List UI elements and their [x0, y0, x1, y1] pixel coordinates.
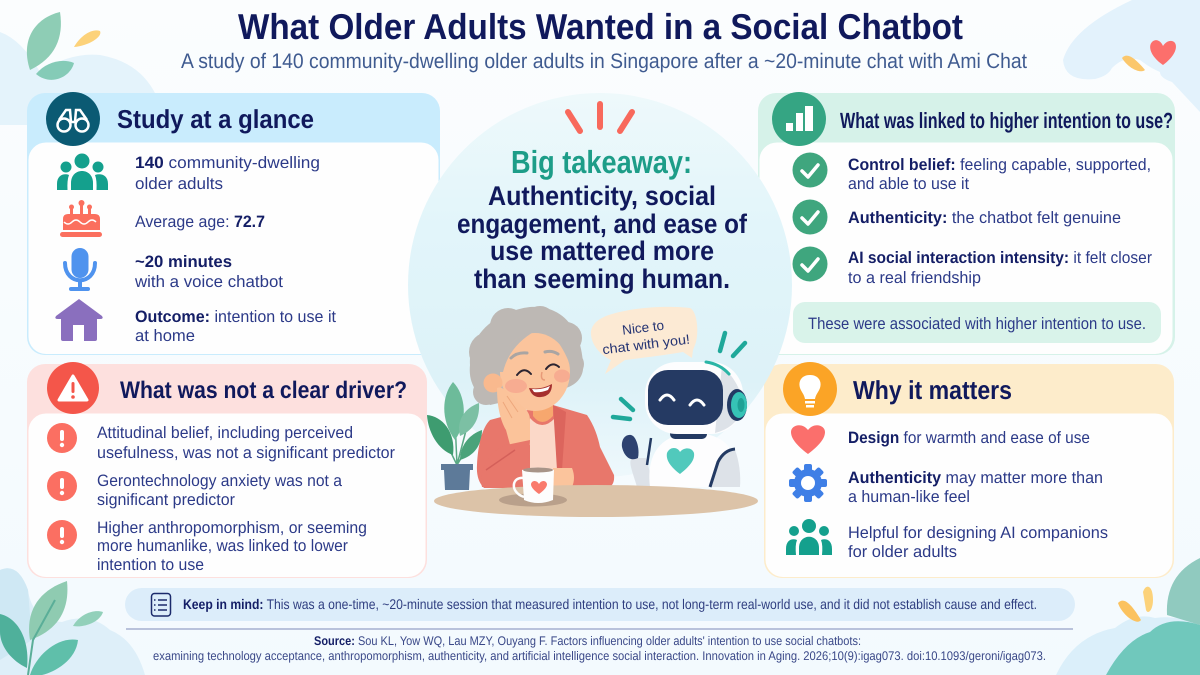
item: authenticity: Authenticity: the chatbot felt genuine [848, 209, 1121, 227]
icon: document [152, 594, 170, 616]
item: gerontechnology anxiety: significant predictor [97, 491, 235, 509]
item: AI companions: Helpful for designing AI companions [848, 524, 1108, 542]
heading: not a clear driver: What was not a clear driver? [120, 377, 407, 404]
item: attitudinal belief: Attitudinal belief, including perceived [97, 424, 353, 442]
decoration: bottom-left cloud and leaves [0, 568, 145, 675]
text: outcome: Outcome: intention to use it [135, 308, 336, 326]
main title: What Older Adults Wanted in a Social Chatbot [238, 6, 963, 47]
big takeaway text: use mattered more [490, 236, 714, 266]
divider [126, 628, 1073, 630]
heading: study at a glance: Study at a glance [117, 104, 314, 134]
big takeaway text: engagement, and ease of [457, 209, 748, 239]
item: design [791, 425, 1090, 454]
sleeve [481, 440, 530, 488]
subtitle: A study of 140 community-dwelling older adults in Singapore after a ~20-minute chat with Ami Chat [181, 50, 1027, 73]
item: authenticity gear: Authenticity may matter more than [848, 469, 1103, 487]
text: session length: ~20 minutes [135, 253, 232, 271]
woman [469, 306, 614, 488]
big takeaway text: than seeming human. [474, 264, 730, 294]
panel: why it matters [764, 362, 1174, 578]
item: control belief [792, 152, 1151, 193]
text: participants: 140 community-dwelling [135, 154, 320, 172]
hair [469, 306, 584, 405]
coffee mug [499, 468, 567, 506]
icon: light bulb [783, 362, 837, 416]
item: social interaction intensity: AI social interaction intensity: it felt closer [848, 249, 1152, 267]
item: authenticity gear [789, 464, 1103, 506]
keep in mind bar [125, 588, 1075, 621]
item: anthropomorphism: Higher anthropomorphism, or seeming [97, 519, 367, 537]
icon: birthday cake [60, 200, 102, 237]
robot [613, 333, 747, 487]
item: anthropomorphism: intention to use [97, 556, 204, 574]
item: authenticity gear: a human-like feel [848, 488, 970, 506]
callout: association note [793, 302, 1161, 343]
speech bubble: chat with you! [602, 332, 691, 357]
callout: association note: These were associated with higher intention to use. [808, 315, 1146, 333]
item: attitudinal belief: usefulness, was not a significant predictor [97, 444, 395, 462]
big takeaway text [457, 144, 748, 294]
table [434, 485, 758, 517]
item: social interaction intensity [792, 246, 1152, 287]
icon: people [57, 154, 108, 190]
source citation: examining technology acceptance, anthropomorphism, authenticity, and artificial intelligence social interaction. Innovation in Aging. 2026;10(9):igag073. doi:10.1093/geroni/igag073. [153, 649, 1046, 663]
item: AI companions: for older adults [848, 543, 957, 561]
item: anthropomorphism [47, 519, 367, 574]
item: attitudinal belief [47, 423, 395, 462]
illustration: woman, robot and table [427, 306, 758, 517]
text: average age: Average age: 72.7 [135, 213, 265, 231]
panel: study at a glance: at home [135, 327, 195, 345]
item: gerontechnology anxiety [47, 471, 343, 509]
big takeaway text: Big takeaway: [511, 144, 692, 180]
central circle background [408, 93, 792, 477]
panel: study at a glance: older adults [135, 175, 223, 193]
item: control belief: and able to use it [848, 175, 969, 193]
icon: microphone [65, 248, 95, 291]
speech bubble [591, 307, 697, 374]
source citation [153, 634, 1046, 663]
item: authenticity [792, 200, 1121, 234]
icon: emphasis ticks [568, 104, 632, 131]
face [500, 333, 570, 411]
panel: study at a glance: with a voice chatbot [134, 273, 283, 291]
item: anthropomorphism: more humanlike, was linked to lower [97, 537, 348, 555]
hand on cheek [497, 387, 530, 452]
panel: study at a glance [27, 92, 440, 355]
source citation: Source: Sou KL, Yow WQ, Lau MZY, Ouyang F. Factors influencing older adults' intention to use social chatbots: [314, 634, 861, 648]
icon: binoculars [46, 92, 100, 146]
item: AI companions [786, 519, 1108, 561]
speech bubble: Nice to [621, 318, 665, 338]
big takeaway text: Authenticity, social [488, 181, 716, 211]
item: control belief: Control belief: feeling capable, supported, [848, 156, 1151, 174]
icon: house [55, 299, 103, 341]
decoration: bottom-right clouds and accents [1056, 558, 1200, 675]
icon: warning [47, 362, 99, 414]
decoration: top-right cloud, heart and accent [1063, 0, 1200, 112]
heading: why it matters: Why it matters [853, 375, 1012, 405]
cardigan [477, 405, 614, 488]
decoration: top-left cloud and leaves [0, 12, 156, 125]
panel: what was not a clear driver [27, 362, 427, 578]
icon: bar chart [772, 92, 826, 146]
item: gerontechnology anxiety: Gerontechnology anxiety was not a [97, 472, 343, 490]
plant [427, 382, 482, 490]
panel: linked to higher intention [758, 92, 1175, 355]
text: keep in mind: Keep in mind: This was a one-time, ~20-minute session that measured intention to use, not long-term real-world use, and it did not establish cause and effect. [183, 596, 1037, 612]
item: design: Design for warmth and ease of use [848, 429, 1090, 447]
item: social interaction intensity: to a real friendship [848, 269, 981, 287]
